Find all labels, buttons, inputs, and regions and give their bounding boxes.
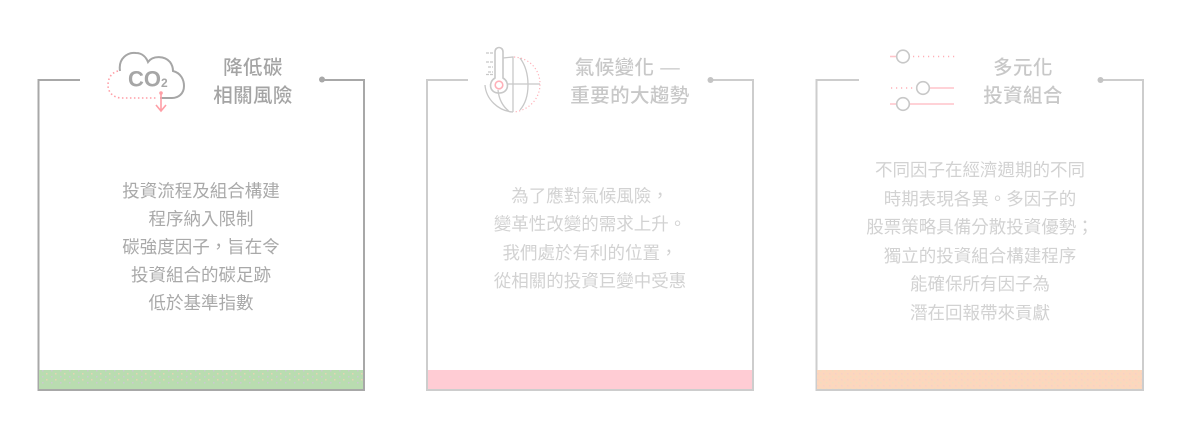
text block xyxy=(494,186,686,291)
heading xyxy=(570,57,690,107)
text block: 為了應對氣候風險， xyxy=(511,186,669,206)
heading: 降低碳 xyxy=(223,57,283,79)
text block xyxy=(122,181,280,313)
heading xyxy=(983,57,1063,107)
text block: 不同因子在經濟週期的不同 xyxy=(875,160,1085,180)
text block: 程序納入限制 xyxy=(148,209,254,229)
panel frame xyxy=(816,77,1144,391)
heading: 氣候變化 — xyxy=(575,57,680,79)
icon: CO2 cloud: CO xyxy=(128,66,161,92)
panel frame xyxy=(426,77,754,391)
heading: 重要的大趨勢 xyxy=(570,85,690,107)
heading xyxy=(213,57,293,107)
heading: 相關風險 xyxy=(213,85,293,107)
text block: 碳強度因子，旨在令 xyxy=(122,237,280,257)
panel: diversified portfolio xyxy=(816,49,1144,391)
icon: CO2 cloud xyxy=(107,52,185,112)
text block: 能確保所有因子為 xyxy=(910,274,1050,294)
icon: thermometer and globe xyxy=(484,46,541,113)
icon: sliders xyxy=(890,49,954,112)
text block: 潛在回報帶來貢獻 xyxy=(910,302,1050,322)
panel frame xyxy=(38,76,365,391)
icon: CO2 cloud: 2 xyxy=(161,76,168,90)
text block: 變革性改變的需求上升。 xyxy=(494,214,686,234)
text block: 從相關的投資巨變中受惠 xyxy=(494,271,686,291)
panel: lower carbon risk xyxy=(38,52,365,391)
text block: 投資組合的碳足跡 xyxy=(131,265,271,285)
heading: 多元化 xyxy=(993,57,1053,79)
text block: 股票策略具備分散投資優勢； xyxy=(866,217,1094,237)
text block xyxy=(866,160,1094,322)
heading: 投資組合 xyxy=(983,85,1063,107)
text block: 我們處於有利的位置， xyxy=(502,242,678,262)
text block: 時期表現各異。多因子的 xyxy=(884,188,1076,208)
text block: 獨立的投資組合構建程序 xyxy=(884,246,1076,266)
text block: 投資流程及組合構建 xyxy=(122,181,280,201)
panel: climate change trend xyxy=(426,46,754,391)
text block: 低於基準指數 xyxy=(148,293,254,313)
